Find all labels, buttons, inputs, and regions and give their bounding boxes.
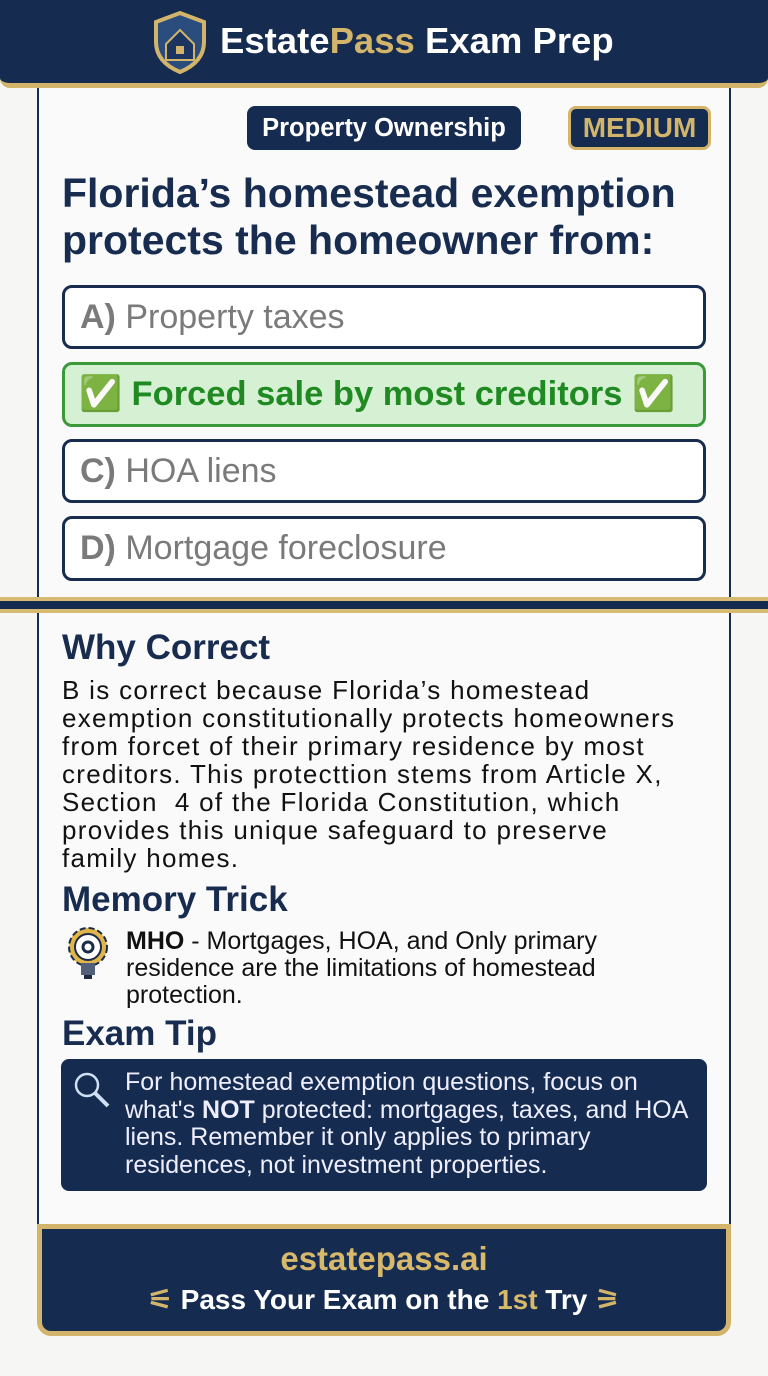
exam tip box bbox=[61, 1059, 707, 1191]
text: explanation: provides this unique safeguard to preserve bbox=[62, 815, 608, 845]
text: explanation: creditors. This protecttion stems from Article X, bbox=[62, 759, 663, 789]
text: explanation: family homes. bbox=[62, 843, 239, 873]
category badge: Property Ownership bbox=[262, 114, 506, 142]
text: explanation: Section 4 of the Florida Constitution, which bbox=[62, 787, 621, 817]
footer bbox=[37, 1224, 731, 1336]
option B correct bbox=[62, 362, 706, 427]
text: exam tip bbox=[125, 1068, 688, 1178]
difficulty badge: MEDIUM bbox=[583, 112, 696, 143]
text: explanation: from forcet of their primary residence by most bbox=[62, 731, 645, 761]
option B correct: ✅ Forced sale by most creditors ✅ bbox=[79, 375, 675, 413]
option C bbox=[62, 439, 706, 503]
option A: A) Property taxes bbox=[80, 298, 345, 336]
text: memory trick bbox=[126, 927, 597, 1009]
difficulty badge bbox=[568, 106, 711, 150]
icon: shield house bbox=[154, 10, 206, 74]
divider bbox=[0, 597, 768, 613]
option D: D) Mortgage foreclosure bbox=[80, 529, 447, 567]
category badge bbox=[247, 106, 521, 150]
option D bbox=[62, 516, 706, 581]
content frame bbox=[37, 88, 731, 1228]
question: protects the homeowner from: bbox=[62, 217, 654, 263]
text: explanation bbox=[62, 675, 675, 873]
text: memory trick: protection. bbox=[126, 981, 243, 1009]
footer url: estatepass.ai bbox=[280, 1240, 488, 1277]
heading: why correct: Why Correct bbox=[62, 628, 270, 667]
icon: magnifier bbox=[74, 1072, 110, 1108]
text: explanation: exemption constitutionally protects homeowners bbox=[62, 703, 675, 733]
text: exam tip: For homestead exemption questions, focus on bbox=[125, 1068, 638, 1096]
option A bbox=[62, 285, 706, 349]
text: exam tip: what's NOT protected: mortgages, taxes, and HOA bbox=[125, 1096, 688, 1124]
header bbox=[0, 0, 768, 88]
text: exam tip: residences, not investment properties. bbox=[125, 1150, 547, 1178]
text: memory trick: MHO - Mortgages, HOA, and Only primary bbox=[126, 927, 597, 955]
icon: gear bulb bbox=[68, 927, 108, 979]
question bbox=[62, 170, 676, 263]
text: explanation: B is correct because Florida’s homestead bbox=[62, 675, 590, 705]
text: memory trick: residence are the limitations of homestead bbox=[126, 954, 596, 982]
option C: C) HOA liens bbox=[80, 452, 277, 490]
text: exam tip: liens. Remember it only applies to primary bbox=[125, 1123, 590, 1151]
heading: memory trick: Memory Trick bbox=[62, 880, 288, 919]
question: Florida’s homestead exemption bbox=[62, 170, 676, 216]
title: EstatePass Exam Prep bbox=[220, 20, 614, 61]
footer tagline: ⚟ Pass Your Exam on the 1st Try ⚞ bbox=[148, 1284, 620, 1315]
heading: exam tip: Exam Tip bbox=[62, 1014, 217, 1053]
